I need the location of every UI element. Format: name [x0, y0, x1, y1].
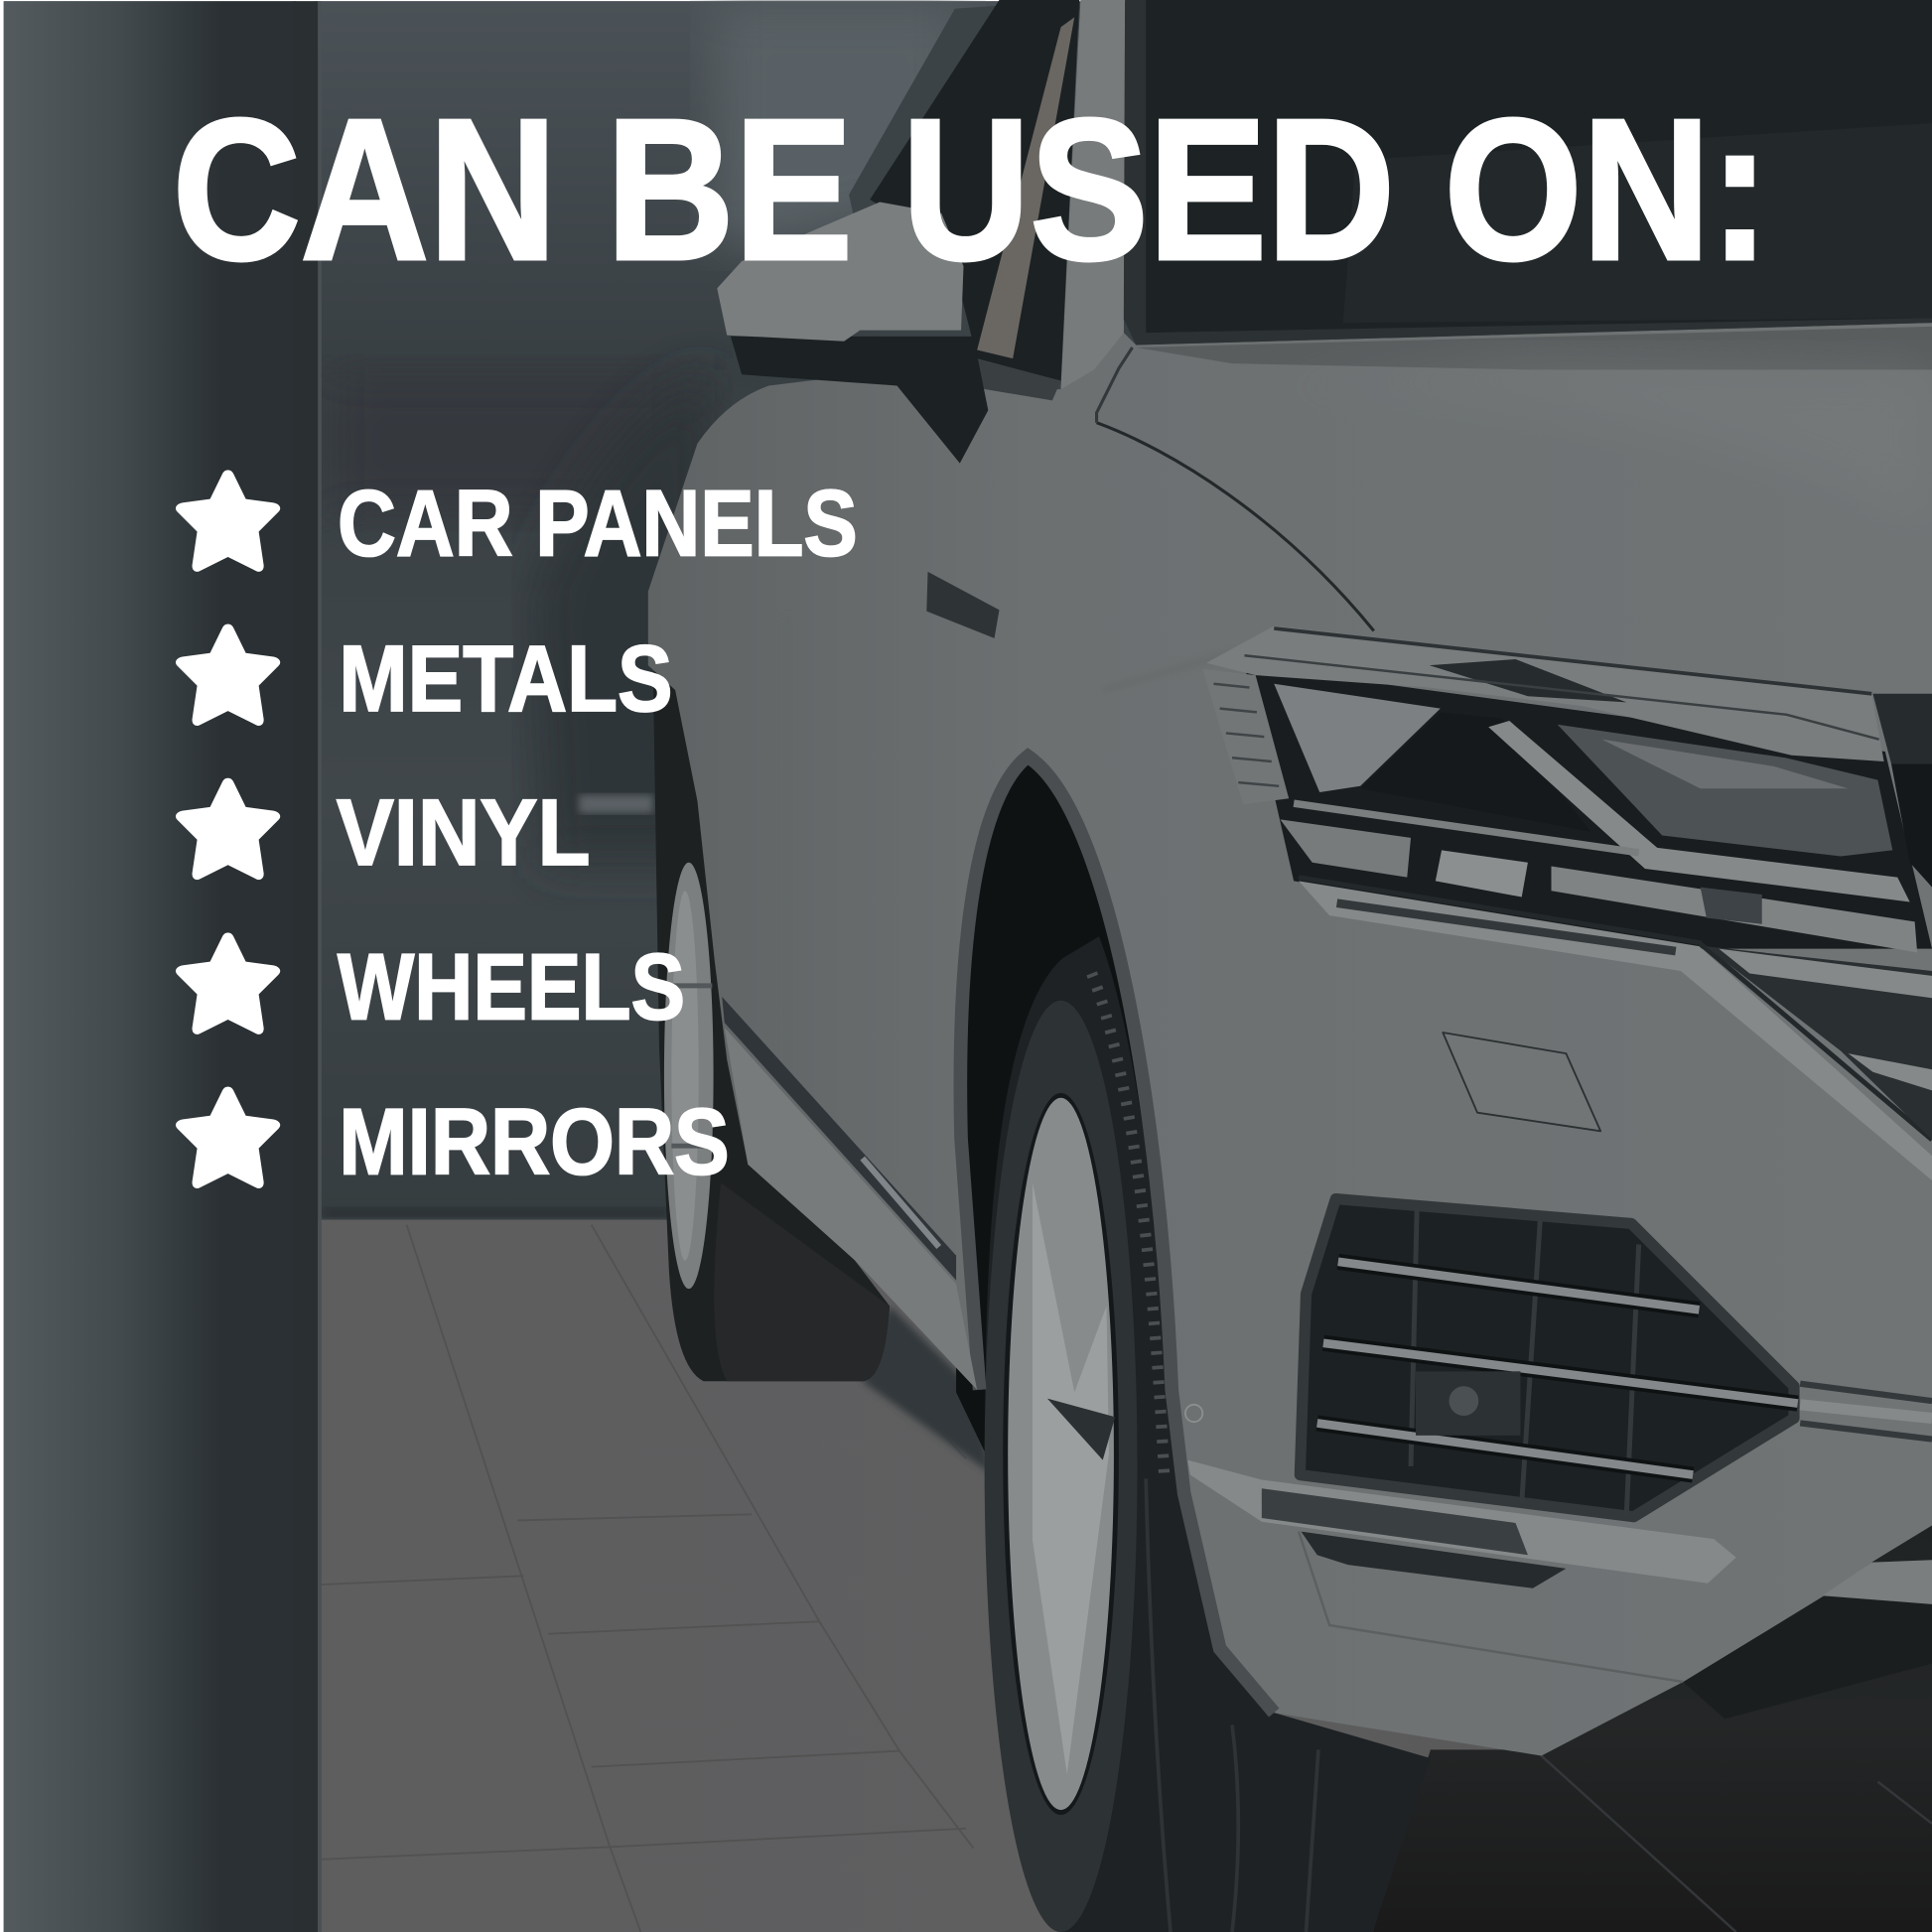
title: CAN BE USED ON:	[173, 77, 1769, 302]
item: car panels	[176, 470, 858, 576]
right lens	[1558, 725, 1892, 857]
item: metals: METALS	[339, 626, 673, 731]
front grille	[1706, 694, 1932, 1140]
showroom glass wall	[314, 1, 1078, 1217]
item: wheels: WHEELS	[338, 934, 685, 1038]
front wheel arch and tire	[956, 752, 1431, 1932]
front rim	[1008, 1098, 1115, 1810]
headlight	[1202, 625, 1932, 952]
item: mirrors	[176, 1087, 730, 1194]
item: wheels	[176, 932, 685, 1038]
pillar	[4, 1, 322, 1932]
upper chrome strip	[1206, 625, 1884, 761]
item: mirrors: MIRRORS	[339, 1090, 730, 1194]
side mirror	[717, 203, 988, 464]
car photo	[648, 0, 1932, 1932]
running light row	[1280, 819, 1917, 952]
diagonal chrome	[1488, 721, 1910, 901]
item: vinyl: VINYL	[337, 780, 590, 885]
windows	[849, 0, 1932, 400]
item: vinyl	[176, 778, 590, 885]
washer cap	[1443, 1033, 1600, 1131]
door badge	[926, 572, 1000, 638]
left lens	[1274, 684, 1441, 792]
lower bumper chrome	[1187, 1460, 1932, 1604]
fender shading and trim	[788, 327, 1932, 1713]
door sill trim	[722, 997, 977, 1390]
list of surfaces	[176, 470, 858, 1194]
item: car panels: CAR PANELS	[338, 472, 858, 576]
vent	[1202, 669, 1289, 804]
item: metals	[176, 624, 673, 731]
car body	[648, 0, 1932, 1756]
lower chrome sweep	[1299, 881, 1932, 1180]
rear wheel	[653, 671, 890, 1381]
fog lamp grille	[1300, 1199, 1932, 1517]
showroom tiled floor	[314, 1220, 1932, 1932]
